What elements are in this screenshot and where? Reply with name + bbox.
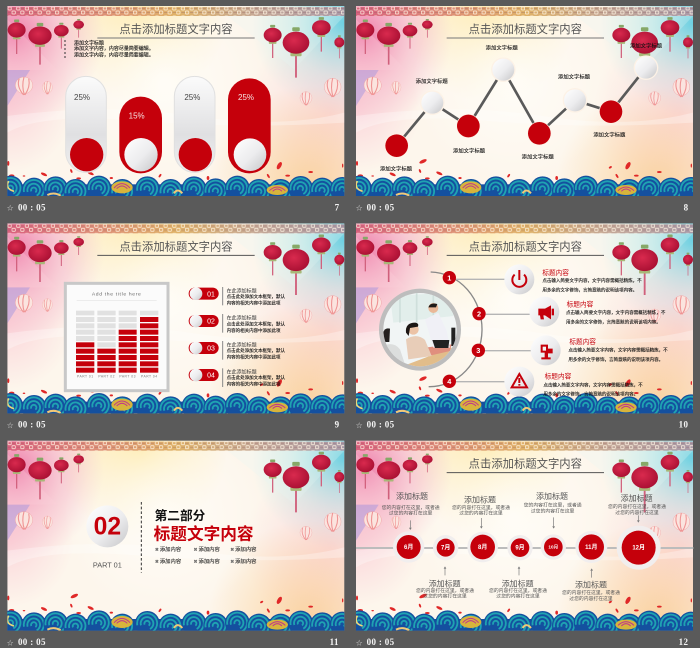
intro text: 添加文字内容，内容尽量简要编辑。: [74, 51, 154, 58]
callout below 7月: [416, 567, 474, 600]
toggle row 04: 04: [207, 373, 215, 380]
pill 4: 25%: [238, 93, 254, 102]
bar labels: [77, 375, 158, 379]
toggle row 01: 内容的相关内容中添加此项: [227, 300, 281, 307]
node labels: 添加文字标题: [558, 73, 591, 81]
footer: [356, 202, 689, 213]
footer: 7: [335, 202, 340, 212]
toggle row 04: 在此添加标题: [227, 368, 257, 375]
pill 3: 25%: [184, 93, 200, 102]
footer: ☆: [7, 204, 14, 213]
item list: ✖ 添加内容: [155, 557, 182, 565]
month nodes: 10月: [548, 545, 558, 551]
nodes: [385, 55, 658, 158]
month nodes: 9月: [515, 545, 525, 552]
callout above 6月: 过您的内容打在这里: [389, 509, 433, 516]
callout below 11月: 过您的内容打在这里: [569, 595, 613, 602]
toggle row 01: [189, 287, 285, 307]
bar labels: PART 04: [141, 375, 158, 379]
number badge: 02: [94, 514, 121, 541]
slide background: [0, 6, 355, 204]
slide 12: month timeline: [347, 441, 700, 647]
callout above 12月: 添加标题: [621, 493, 653, 503]
month nodes: 7月: [441, 545, 450, 552]
dashed divider: [140, 502, 143, 573]
callout above 10月: 添加标题: [536, 491, 568, 501]
footer: 8: [684, 202, 689, 212]
heading: 第二部分: [155, 508, 206, 523]
toggle row 02: [189, 314, 285, 334]
slide 7: pill percentage chart: [0, 6, 355, 213]
footer: 00 : 05: [367, 420, 395, 430]
intro text: 添加文字标题: [74, 39, 104, 46]
footer: [7, 637, 339, 647]
footer: [356, 420, 688, 430]
item list: ✖ 添加内容: [230, 557, 257, 565]
month nodes: 11月: [585, 544, 598, 551]
callout below 11月: [562, 569, 620, 602]
callout above 10月: 您的内容打在这里，或者通: [524, 501, 582, 508]
footer: [356, 637, 688, 647]
icon: tool: [531, 335, 561, 365]
month nodes: 8月: [478, 544, 487, 551]
footer: ☆: [356, 421, 363, 430]
callout above 8月: 您的内容打在这里，或者通: [452, 504, 510, 511]
callout below 7月: 您的内容打在这里，或者通: [416, 587, 474, 594]
toggle row 04: 点击此处添加文本框架，默认: [227, 374, 285, 381]
line path: [397, 68, 646, 146]
item 1: 标题内容: [542, 268, 569, 277]
footer: 00 : 05: [18, 420, 46, 430]
slide background: [347, 223, 700, 421]
item 2: 用多余的文字修饰，言简意赅的说明该项内容。: [566, 318, 661, 325]
callout above 8月: [452, 494, 510, 528]
callout below 9月: 添加标题: [502, 578, 534, 588]
callout above 8月: 过您的内容打在这里: [459, 509, 503, 516]
number badge: [86, 505, 128, 547]
node labels: 添加文字标题: [416, 77, 448, 85]
slide 8: zigzag line chart: [347, 6, 700, 213]
item list: ✖ 添加内容: [230, 545, 257, 553]
footer: ☆: [7, 638, 14, 647]
footer: ☆: [356, 638, 363, 647]
arc: [429, 272, 482, 387]
slide background: [347, 441, 700, 638]
icon: power: [504, 264, 534, 294]
item 3: 点击输入简要文字内容，文字内容需概括精炼，不: [568, 347, 668, 354]
dashed divider: [63, 40, 66, 60]
slide 9: bar card and toggle list: [0, 223, 355, 430]
pill 4: [228, 78, 271, 173]
bar labels: PART 02: [98, 375, 115, 379]
item list: ✖ 添加内容: [194, 557, 220, 565]
item 1: 点击输入简要文字内容，文字内容需概括精炼，不: [542, 277, 642, 284]
title: 点击添加标题文字内容: [469, 22, 582, 36]
toggle row 01: 在此添加标题: [227, 288, 257, 295]
item 4: 用多余的文字修饰，言简意赅的说明该项内容。: [543, 391, 638, 398]
title: 点击添加标题文字内容: [469, 239, 582, 253]
chart card: [65, 283, 168, 391]
footer: 11: [330, 637, 339, 647]
pill 1: 25%: [74, 93, 90, 102]
node labels: 添加文字标题: [522, 153, 554, 161]
pill 2: 15%: [129, 112, 145, 121]
callout below 9月: [489, 567, 547, 600]
part label: PART 01: [93, 561, 122, 570]
main title: 标题文字内容: [154, 523, 254, 543]
toggle row 03: 03: [207, 346, 215, 353]
month nodes: 12月: [632, 545, 645, 552]
footer: [7, 420, 340, 430]
title: 点击添加标题文字内容: [119, 239, 233, 253]
footer: 9: [335, 420, 340, 430]
pill 2: [119, 97, 162, 173]
numbered nodes: 3: [476, 346, 480, 355]
footer: 00 : 05: [367, 637, 395, 647]
bar labels: PART 03: [119, 375, 136, 379]
toggle row 04: 内容的相关内容中添加此项: [227, 381, 281, 388]
pill 3: [174, 76, 215, 172]
numbered nodes: [443, 271, 486, 388]
callout above 8月: 添加标题: [464, 494, 496, 504]
callout below 9月: 过您的内容打在这里: [496, 593, 540, 600]
footer: ☆: [356, 204, 363, 213]
slide 10: arc with four items: [347, 223, 700, 430]
callout below 11月: 您的内容打在这里，或者通: [562, 589, 620, 596]
callout above 12月: [608, 493, 666, 522]
item 1: 用多余的文字修饰，言简意赅的说明该项内容。: [542, 287, 637, 294]
callout below 7月: 过您的内容打在这里: [423, 593, 467, 600]
callout above 6月: 添加标题: [396, 491, 428, 501]
node labels: 添加文字标题: [380, 165, 413, 173]
slide background: [0, 441, 355, 638]
toggle row 03: 点击此处添加文本框架，默认: [227, 347, 285, 354]
toggle row 03: 在此添加标题: [227, 341, 257, 348]
toggle row 02: 在此添加标题: [227, 315, 257, 322]
callout below 7月: 添加标题: [429, 578, 461, 588]
footer: 00 : 05: [18, 202, 46, 212]
toggle row 04: [189, 368, 285, 388]
toggle row 03: [189, 341, 285, 361]
item 3: 用多余的文字修饰，言简意赅的说明该项内容。: [568, 356, 663, 363]
bar labels: PART 01: [77, 375, 94, 379]
month nodes: 6月: [404, 544, 413, 551]
item 2: 点击输入简要文字内容，文字内容需概括精炼，不: [566, 309, 666, 316]
toggle row 02: 02: [207, 319, 215, 326]
node labels: 添加文字标题: [453, 147, 486, 155]
node labels: 添加文字标题: [630, 42, 663, 50]
numbered nodes: 1: [447, 273, 451, 282]
callout above 6月: [382, 491, 440, 529]
node labels: 添加文字标题: [593, 131, 626, 139]
toggle row 01: 01: [207, 291, 215, 298]
office photo: [379, 289, 461, 373]
callout above 10月: [524, 491, 582, 528]
pill 1: [66, 76, 106, 172]
intro text: 添加文字内容，内容尽量简要编辑。: [74, 45, 154, 52]
timeline axis: [356, 545, 693, 551]
callout below 9月: 您的内容打在这里，或者通: [489, 587, 547, 594]
item list: ✖ 添加内容: [194, 545, 220, 553]
callout above 10月: 过您的内容打在这里: [531, 507, 575, 514]
numbered nodes: 2: [477, 309, 481, 318]
intro text: [74, 39, 154, 58]
connector lines: [456, 279, 531, 382]
node labels: 添加文字标题: [486, 43, 518, 51]
item list: [155, 545, 257, 565]
item 1: [504, 264, 642, 294]
item 4: [504, 367, 643, 398]
numbered nodes: 4: [447, 377, 452, 386]
item 3: [531, 335, 668, 365]
month nodes: [393, 526, 661, 570]
toggle row 02: 内容的相关内容中添加此项: [227, 327, 281, 334]
footer: 10: [679, 420, 688, 430]
toggle row 01: 点击此处添加文本框架，默认: [227, 293, 285, 300]
item 2: 标题内容: [567, 299, 594, 308]
chart card: Add the title here: [92, 291, 142, 297]
item list: ✖ 添加内容: [155, 545, 182, 553]
callout above 12月: 过您的内容打在这里: [615, 509, 659, 516]
icon: warning: [504, 367, 534, 397]
icon: megaphone: [529, 297, 559, 327]
item 3: 标题内容: [569, 337, 596, 346]
callout above 12月: 您的内容打在这里，或者通: [608, 503, 666, 510]
footer: 00 : 05: [367, 202, 395, 212]
callout above 6月: 您的内容打在这里，或者通: [382, 504, 440, 511]
slide background: [0, 223, 355, 421]
title: 点击添加标题文字内容: [469, 457, 582, 471]
callout below 11月: 添加标题: [575, 580, 607, 590]
footer: ☆: [7, 421, 14, 430]
footer: 12: [679, 637, 688, 647]
bars: [76, 311, 158, 347]
title: 点击添加标题文字内容: [119, 22, 233, 36]
footer: 00 : 05: [18, 637, 46, 647]
slide background: [347, 6, 700, 204]
footer: [7, 202, 340, 213]
item 2: [529, 297, 666, 327]
item 4: 点击输入简要文字内容，文字内容需概括精炼，不: [543, 381, 643, 388]
node labels: [380, 42, 663, 173]
item 4: 标题内容: [545, 372, 572, 381]
toggle row 02: 点击此处添加文本框架，默认: [227, 320, 285, 327]
toggle row 03: 内容的相关内容中添加此项: [227, 354, 281, 361]
slide 11: section divider: [0, 441, 355, 647]
